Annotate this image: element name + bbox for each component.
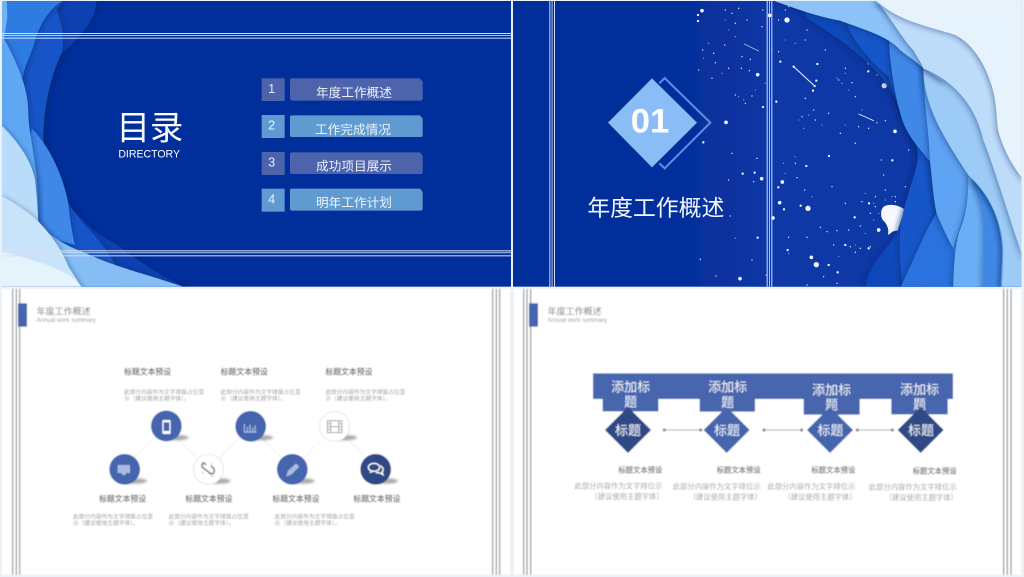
text block top 2: 示（建议使用主题字体）。 bbox=[221, 395, 286, 403]
item 2: 工作完成情况 bbox=[315, 123, 391, 137]
title: 目录: DIRECTORY bbox=[118, 148, 180, 160]
panel: diamond process slide bbox=[514, 289, 1021, 575]
ribbon label 4: 添加标 bbox=[900, 382, 939, 397]
horizontal line pair bottom bbox=[2, 250, 511, 256]
ribbon label 1: 添加标 bbox=[611, 379, 650, 394]
text block top 2: 此部分内容作为文字排版占位显 bbox=[221, 388, 301, 396]
text block 2: 此部分内容作为文字排位示 bbox=[673, 482, 761, 491]
text block 3: （建议使用主题字体） bbox=[783, 493, 857, 502]
item 2: 2 bbox=[268, 118, 275, 132]
ribbon label 3: 添加标 bbox=[812, 383, 851, 398]
slide background bbox=[2, 1, 511, 287]
text block 2: （建议使用主题字体） bbox=[689, 493, 762, 502]
diamond 3: 标题 bbox=[817, 423, 843, 438]
item 1 bbox=[262, 78, 423, 101]
paint splatter bbox=[698, 7, 909, 285]
header title: 年度工作概述 bbox=[548, 306, 602, 317]
panel: section 01 slide bbox=[513, 0, 1024, 290]
text block top 1: 此部分内容作为文字排版占位显 bbox=[124, 388, 204, 396]
panel: directory slide bbox=[0, 0, 511, 290]
diamond badge 01: 01 bbox=[631, 103, 669, 141]
dashed connectors bbox=[135, 438, 365, 458]
text block top 2: 标题文本预设 bbox=[221, 367, 268, 377]
text block 1 bbox=[574, 465, 664, 501]
header title: 年度工作概述 bbox=[37, 306, 91, 317]
diamond 1: 标题 bbox=[615, 423, 641, 438]
slide background bbox=[514, 289, 1021, 575]
ribbon label 2: 题 bbox=[721, 395, 734, 410]
vertical lines right bbox=[492, 289, 500, 575]
circle shadows bbox=[123, 435, 398, 484]
item 4 bbox=[262, 189, 423, 212]
icon: monitor bbox=[109, 454, 140, 485]
icon: bar chart bbox=[235, 411, 266, 442]
item 4: 明年工作计划 bbox=[316, 196, 392, 210]
item 2 bbox=[262, 115, 423, 138]
diamond 1 bbox=[605, 407, 651, 453]
item 1: 1 bbox=[268, 82, 275, 96]
text block top 3: 此部分内容作为文字排版占位显 bbox=[325, 388, 406, 396]
text block 1: 此部分内容作为文字排位示 bbox=[574, 481, 662, 490]
text block bottom 2: 示（建议使用主题字体）。 bbox=[169, 519, 234, 527]
text block 1: （建议使用主题字体） bbox=[590, 492, 664, 501]
diamond 4 bbox=[898, 407, 944, 453]
text block bottom 3: 此部分内容作为文字排版占位显 bbox=[275, 512, 355, 520]
text block bottom 1: 标题文本预设 bbox=[99, 494, 146, 504]
header title: Annual work summary bbox=[548, 318, 607, 324]
ribbon label 2: 添加标 bbox=[708, 380, 747, 395]
text block 2: 标题文本预设 bbox=[717, 466, 761, 475]
header tag bbox=[18, 303, 27, 327]
paper-cut waves left bbox=[0, 0, 187, 290]
vertical lines right bbox=[1003, 289, 1012, 575]
text block 4: 此部分内容作为文字排位示 bbox=[869, 483, 957, 492]
text block bottom 1 bbox=[73, 494, 153, 527]
text block top 1: 标题文本预设 bbox=[124, 367, 171, 377]
text block 2 bbox=[673, 466, 762, 502]
text block bottom 1: 此部分内容作为文字排版占位显 bbox=[73, 512, 153, 520]
text block top 3 bbox=[325, 367, 406, 403]
text block bottom 2 bbox=[169, 494, 249, 527]
diamond badge 01 bbox=[608, 78, 710, 168]
slide background bbox=[513, 1, 1021, 287]
vertical lines left bbox=[549, 1, 555, 287]
ribbon band with tabs bbox=[593, 373, 953, 415]
white paint blot bbox=[881, 205, 905, 235]
text block 3 bbox=[767, 466, 857, 502]
text block bottom 2: 标题文本预设 bbox=[185, 494, 233, 504]
diamond 3 bbox=[807, 407, 853, 453]
text block top 2 bbox=[221, 367, 301, 403]
ribbon label 3: 题 bbox=[825, 398, 838, 413]
text block 1: 标题文本预设 bbox=[618, 465, 663, 474]
connector arrows bbox=[663, 429, 893, 431]
vertical lines left bbox=[12, 289, 20, 575]
horizontal line pair top bbox=[2, 33, 511, 39]
text block 4: （建议使用主题字体） bbox=[885, 493, 958, 502]
item 4: 4 bbox=[268, 192, 275, 206]
header title bbox=[37, 306, 96, 324]
ribbon label 1: 题 bbox=[624, 394, 637, 409]
paper-cut waves right bbox=[772, 0, 1024, 290]
item 3: 成功项目展示 bbox=[316, 160, 392, 174]
ribbon label 4: 题 bbox=[913, 397, 926, 412]
text block 3: 标题文本预设 bbox=[811, 466, 856, 475]
diamond 4: 标题 bbox=[908, 423, 934, 438]
text block bottom 2: 此部分内容作为文字排版占位显 bbox=[169, 512, 249, 520]
text block top 3: 标题文本预设 bbox=[325, 367, 373, 377]
vertical lines left bbox=[523, 289, 531, 575]
text block 4 bbox=[869, 466, 958, 502]
vertical lines right bbox=[767, 1, 772, 287]
text block bottom 4: 标题文本预设 bbox=[353, 494, 401, 504]
panel: timeline circles slide bbox=[2, 289, 510, 575]
text block top 3: 示（建议使用主题字体）。 bbox=[325, 395, 391, 403]
diamond 2: 标题 bbox=[714, 423, 740, 438]
header title bbox=[548, 306, 607, 324]
icon: broken link bbox=[193, 454, 223, 484]
text block 4: 标题文本预设 bbox=[913, 466, 957, 475]
item 3 bbox=[262, 152, 423, 175]
icon: pencil bbox=[277, 454, 308, 485]
item 1: 年度工作概述 bbox=[316, 85, 392, 100]
text block top 1 bbox=[124, 367, 204, 403]
slide background bbox=[2, 289, 510, 575]
icon: speech bubbles bbox=[360, 454, 391, 485]
header tag bbox=[529, 303, 538, 327]
diamond 2 bbox=[704, 407, 750, 453]
icon: phone bbox=[151, 411, 182, 441]
section title: 年度工作概述 bbox=[587, 195, 724, 221]
text block bottom 3: 示（建议使用主题字体）。 bbox=[275, 519, 340, 527]
item 3: 3 bbox=[268, 155, 275, 169]
text block bottom 3: 标题文本预设 bbox=[272, 494, 320, 504]
title: 目录: 目录 bbox=[117, 110, 183, 147]
header title: Annual work summary bbox=[37, 318, 96, 324]
icon: film bbox=[320, 411, 350, 441]
text block 3: 此部分内容作为文字排位示 bbox=[767, 482, 855, 491]
text block top 1: 示（建议使用主题字体）。 bbox=[124, 395, 190, 403]
star field glow bbox=[692, 1, 925, 287]
text block bottom 3 bbox=[272, 494, 355, 527]
text block bottom 1: 示（建议使用主题字体）。 bbox=[73, 519, 139, 527]
